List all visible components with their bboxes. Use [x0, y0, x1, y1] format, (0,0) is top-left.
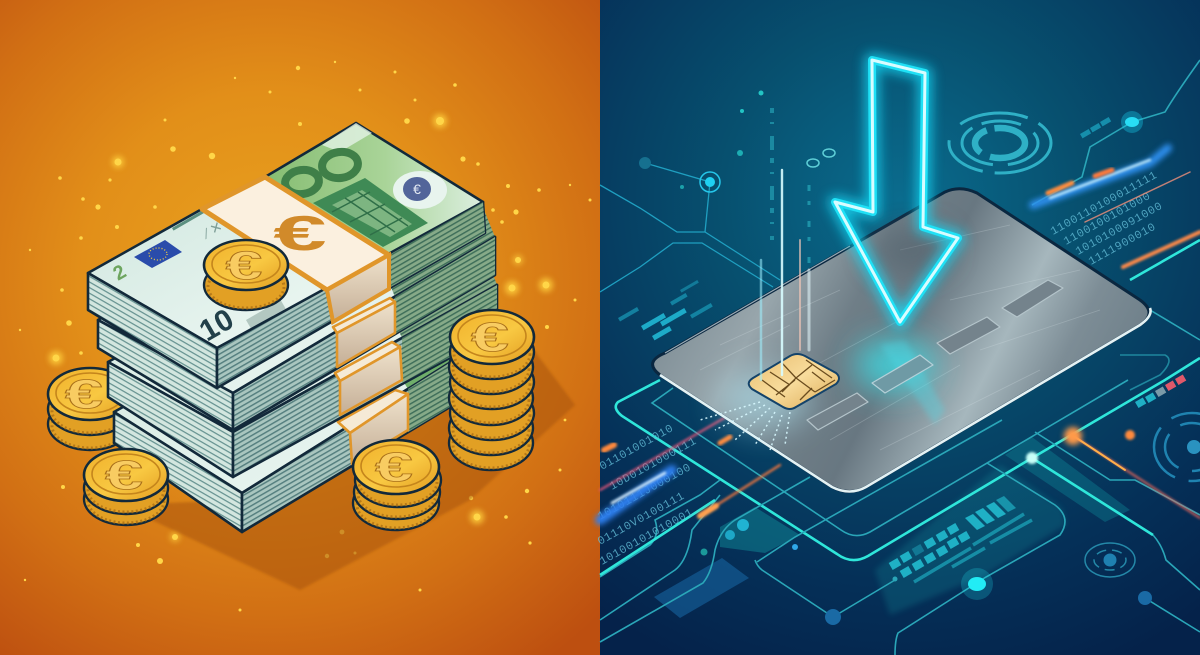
paper band: [338, 390, 408, 464]
note bundle 1, top: [88, 123, 485, 388]
panel: euro cash: [0, 0, 600, 655]
coin stack: bottom centre: €: [375, 444, 413, 490]
sparkle halos: [49, 114, 553, 542]
back corner highlight: [322, 123, 372, 152]
coin stack: bottom centre: [353, 440, 441, 530]
teal floor tints: [654, 437, 1130, 618]
card slot 4: [1002, 280, 1063, 317]
right note face: [265, 123, 483, 255]
card chip: [749, 354, 839, 409]
note bundle 1, top: €: [273, 206, 327, 261]
left note face: [88, 209, 327, 348]
HUD ring: upper right: [949, 113, 1051, 173]
EU flag: [134, 240, 182, 268]
denomination 00: [283, 150, 360, 196]
metal card: [653, 189, 1151, 492]
edge highlight: [660, 308, 1151, 492]
paper band: [335, 342, 402, 415]
binary text lower left: 01101001010: [598, 422, 676, 473]
coin stack: bottom left: [84, 449, 168, 525]
coin stack: left, behind notes: €: [65, 371, 103, 417]
note serial: 2: [110, 261, 130, 285]
note bridge artwork: [313, 178, 428, 247]
circuit nodes: [639, 90, 1152, 625]
coin stack: left, behind notes: [48, 368, 132, 450]
binary text upper right: 1111900010: [1087, 221, 1159, 268]
panel: digital card: [596, 0, 1200, 655]
paper band: [333, 298, 395, 367]
brushed texture: [700, 225, 1100, 450]
bar and dot glyph block: [889, 374, 1186, 582]
chip glow: [720, 372, 810, 428]
binary text lower left: 1010111J000100: [596, 461, 694, 523]
note seal: [393, 171, 447, 209]
coin stack: bottom left: €: [105, 452, 143, 498]
binary text lower left: 10100101010001: [598, 506, 696, 568]
note bundle 1, top: ∕ ✕: [199, 218, 225, 242]
arrow reflection glow: [855, 339, 935, 391]
binary text lower left: 10D0101000111: [608, 435, 699, 493]
binary text upper right: 1100110100011111: [1049, 169, 1160, 238]
circuit traces: [600, 60, 1200, 655]
cast shadow: [120, 345, 575, 590]
binary text upper right: [1049, 169, 1165, 268]
card slot 1: [807, 393, 868, 430]
chip data burst: [700, 402, 790, 450]
paper band with euro: [202, 177, 389, 290]
data dashes: [618, 117, 1111, 340]
note bundle 1, top: €: [413, 181, 421, 197]
card slot 3: [937, 317, 1000, 354]
denomination 10: 10: [194, 303, 239, 348]
light streaks: [600, 148, 1200, 520]
note bundle 3: [108, 215, 497, 477]
card slot 2: [872, 355, 933, 393]
coin stack: on top of notes: [204, 240, 288, 310]
binary text lower left: [596, 422, 699, 568]
coin stack: on top of notes: €: [226, 243, 262, 288]
vertical light beams: [750, 60, 809, 380]
sparkles: [19, 61, 592, 612]
target ring: [1085, 543, 1135, 577]
dashed vertical data line: [770, 108, 774, 240]
note bundle 2: [98, 165, 495, 430]
coin stack: tall right: [449, 310, 534, 470]
neon download arrow: [835, 60, 958, 322]
binary text upper right: 1010100091000: [1074, 200, 1165, 258]
binary text lower left: 01110V0100111: [596, 490, 687, 548]
binary text upper right: 1100100101000: [1062, 190, 1153, 248]
coin stack: tall right: €: [471, 314, 509, 360]
HUD ring: lower right: [1154, 413, 1200, 481]
note bundle 4, bottom: [114, 285, 470, 532]
